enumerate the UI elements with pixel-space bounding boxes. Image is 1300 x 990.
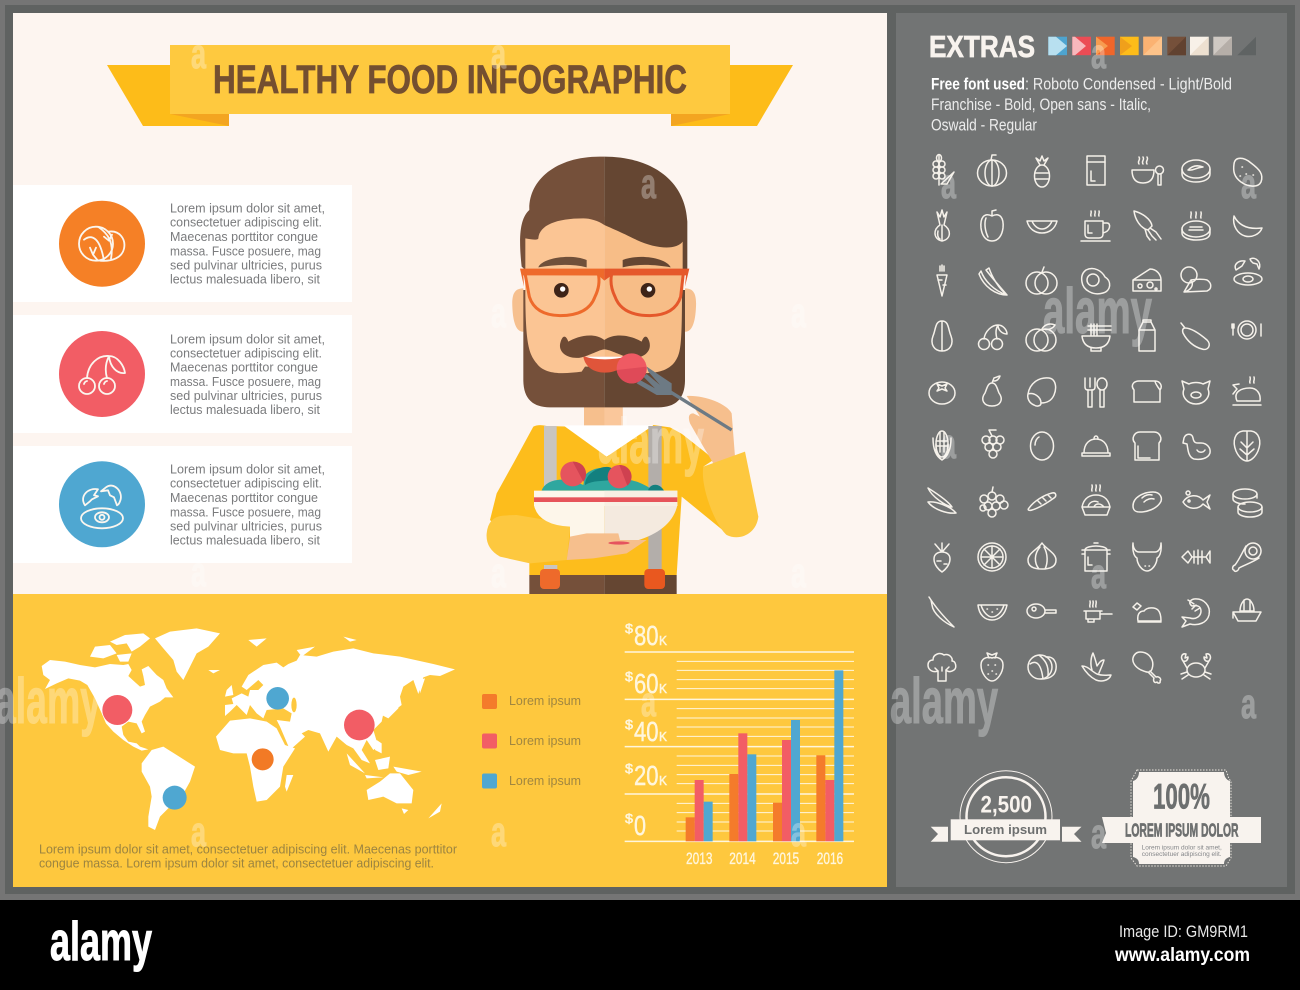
text block: Maecenas porttitor congue: [170, 491, 318, 505]
icon: canned food: [1233, 489, 1262, 517]
map land: [42, 628, 455, 830]
salad: [542, 468, 653, 491]
text block: massa. Fusce posuere, mag: [170, 244, 321, 258]
icon: lettuce: [1234, 431, 1260, 461]
text block: consectetuer adipiscing elit.: [170, 216, 322, 230]
eyebrows: [538, 257, 587, 267]
text block: lectus malesuada libero, sit: [170, 403, 321, 417]
watermarks: a: [791, 808, 806, 855]
font credits: : Roboto Condensed - Light/Bold: [1025, 74, 1232, 94]
icon grid: [928, 154, 1264, 683]
icon: steak: [1182, 160, 1210, 182]
left arm: [487, 515, 571, 563]
icon: toast: [1133, 432, 1161, 460]
watermarks: a: [941, 420, 956, 467]
icon: citrus slice: [978, 543, 1006, 571]
icon: pear: [983, 376, 1001, 406]
right sleeve: [703, 452, 758, 537]
watermarks: a: [491, 808, 506, 855]
bars 2015: [773, 720, 800, 841]
y axis labels: 60: [634, 668, 658, 699]
icon: avocado: [932, 321, 952, 351]
font credits: Franchise - Bold, Open sans - Italic,: [931, 95, 1151, 114]
text block: lectus malesuada libero, sit: [170, 533, 321, 547]
fork with tomato: [670, 392, 732, 430]
icon: melon slice: [1027, 221, 1057, 233]
icon: egg: [1030, 432, 1054, 460]
text block: massa. Fusce posuere, mag: [170, 375, 321, 389]
footer: url: www.alamy.com: [1114, 945, 1250, 966]
icon: peach: [1026, 267, 1057, 294]
left hand: [567, 533, 647, 560]
ears: [512, 288, 696, 332]
legend: Lorem ipsum: [509, 774, 581, 788]
watermarks: alamy: [598, 405, 704, 477]
watermarks: a: [1241, 680, 1256, 727]
icon: garlic: [1028, 543, 1056, 569]
text block: sed pulvinar ultricies, purus: [170, 389, 322, 403]
icon: milk carton: [1139, 320, 1155, 351]
map caption: Lorem ipsum dolor sit amet, consectetuer adipiscing elit. Maecenas porttitor: [39, 841, 458, 856]
legend: [482, 694, 581, 788]
icon: pig: [1182, 381, 1210, 404]
y axis labels: K: [659, 681, 667, 696]
x axis labels: 2013: [686, 849, 712, 868]
legend: Lorem ipsum: [509, 694, 581, 708]
bars 2016: [816, 670, 843, 841]
bowl: [534, 505, 604, 540]
badge: 100%: [1102, 770, 1261, 866]
legend: Lorem ipsum: [509, 734, 581, 748]
icon: grapes: [982, 430, 1004, 458]
icon: cabbage: [1028, 655, 1056, 679]
text block: Maecenas porttitor congue: [170, 361, 318, 375]
text block: consectetuer adipiscing elit.: [170, 477, 322, 491]
panel: egg item: [13, 446, 352, 563]
icon: ham leg: [1233, 540, 1264, 571]
watermarks: alamy: [0, 665, 101, 737]
icon: berry cluster: [980, 487, 1008, 517]
watermarks: a: [1091, 810, 1106, 857]
icon: crab: [1181, 654, 1211, 679]
panel: cherry item: [13, 315, 352, 433]
icon: cabbage: [59, 201, 145, 287]
y axis labels: $: [625, 717, 634, 732]
icon: cherries grid: [978, 325, 1007, 350]
y axis labels: 0: [634, 810, 646, 841]
watermarks: a: [191, 808, 206, 855]
icon: strawberry: [981, 653, 1003, 681]
glasses: [525, 273, 683, 316]
title: HEALTHY FOOD INFOGRAPHIC: [213, 58, 687, 102]
suspenders: [544, 426, 557, 498]
y axis labels: 80: [634, 620, 658, 651]
text block: [170, 332, 325, 417]
icon: bread: [1133, 492, 1161, 512]
watermarks: a: [1241, 160, 1256, 207]
y axis labels: 40: [634, 716, 658, 747]
icon: bell pepper: [981, 210, 1003, 241]
footer: stock logo: alamy: [50, 910, 152, 972]
icon: hot steak: [1182, 212, 1210, 240]
icon: pumpkin: [978, 155, 1006, 186]
watermarks: a: [791, 549, 806, 596]
icon: cracked egg: [1234, 258, 1262, 285]
text block: Lorem ipsum dolor sit amet,: [170, 202, 325, 216]
badge: 2,500: Lorem ipsum: [964, 822, 1047, 837]
shirt collar: [563, 425, 653, 457]
map caption: congue massa. Lorem ipsum dolor sit amet, consectetuer adipiscing elit.: [39, 856, 434, 871]
text block: Lorem ipsum dolor sit amet,: [170, 332, 325, 346]
icon: baguette: [1028, 493, 1056, 510]
watermarks: a: [641, 160, 656, 207]
text block: Lorem ipsum dolor sit amet,: [170, 463, 325, 477]
beard: [523, 290, 604, 407]
icon: chili mango: [1234, 216, 1262, 237]
eyes: [554, 283, 569, 298]
icon: wheat: [933, 154, 954, 185]
text block: Maecenas porttitor congue: [170, 230, 318, 244]
icon: chili: [929, 597, 954, 627]
right hand: [687, 396, 735, 463]
watermarks: a: [491, 549, 506, 596]
icon: squid: [1134, 211, 1161, 240]
y axis labels: K: [659, 773, 667, 788]
icon: roast chicken: [1233, 377, 1261, 405]
panel: left infographic: [13, 13, 887, 887]
badge: 100%: 100%: [1153, 777, 1210, 816]
watermarks: alamy: [1043, 275, 1152, 347]
font credits: Oswald - Regular: [931, 116, 1037, 134]
text block: lectus malesuada libero, sit: [170, 272, 321, 286]
y axis labels: $: [625, 621, 634, 636]
y axis labels: K: [659, 633, 667, 648]
icon: carrot: [937, 265, 947, 296]
watermarks: a: [941, 160, 956, 207]
icon: bread loaf: [1132, 381, 1161, 402]
pants: [529, 575, 604, 594]
icon: beetroot: [934, 543, 950, 572]
mouth: [583, 357, 627, 373]
icon: citrus juicer: [1233, 599, 1261, 621]
watermarks: a: [1091, 30, 1106, 77]
icon: fish: [1183, 491, 1210, 509]
icon: chicken: [1183, 434, 1210, 459]
bars 2013: [686, 780, 713, 841]
icon: tomato: [929, 382, 955, 404]
icon: plate and cutlery: [1232, 321, 1261, 339]
x axis labels: 2016: [817, 849, 843, 868]
text block: consectetuer adipiscing elit.: [170, 346, 322, 360]
y axis labels: $: [625, 811, 634, 826]
torso: [490, 425, 727, 575]
icon: watermelon: [978, 605, 1007, 620]
colour swatches: [1048, 37, 1256, 55]
badge: 100%: consectetuer adipiscing elit.: [1142, 851, 1222, 858]
watermarks: alamy: [890, 665, 998, 737]
bar chart: [625, 620, 854, 868]
badge: 2,500: 2,500: [980, 792, 1032, 819]
icon: corn: [933, 431, 951, 460]
panel: extras: [896, 13, 1287, 887]
icon: shrimp: [1182, 599, 1209, 627]
icon: coffee cup: [1081, 211, 1110, 241]
y axis labels: 20: [634, 760, 658, 791]
icon: sausage slice: [1181, 267, 1211, 292]
icon: spaghetti: [1082, 485, 1110, 515]
x axis labels: [686, 849, 843, 868]
watermarks: a: [191, 548, 206, 595]
face: [525, 217, 604, 373]
icon: fish bone: [1182, 550, 1210, 564]
icon: eggplant: [1181, 323, 1209, 349]
icon: banana: [1082, 653, 1111, 681]
icon: apricot: [1026, 324, 1056, 351]
map caption: [39, 841, 458, 871]
icon: hot pan: [1084, 601, 1112, 622]
icon: frying pan egg: [1027, 604, 1056, 618]
illustration: man eating salad: [487, 157, 758, 594]
icon: bull: [1133, 543, 1161, 571]
text block: [170, 202, 325, 286]
panel: cabbage item: [13, 185, 352, 302]
watermarks: a: [491, 289, 506, 336]
watermarks: a: [1091, 550, 1106, 597]
text block: sed pulvinar ultricies, purus: [170, 258, 322, 272]
text block: massa. Fusce posuere, mag: [170, 505, 321, 519]
icon: fried egg: [1082, 269, 1110, 294]
icon: glass: [1087, 156, 1105, 185]
bars 2014: [729, 733, 756, 841]
font credits: Free font used: [931, 74, 1025, 94]
icon: chili peppers: [979, 268, 1007, 295]
watermarks: a: [641, 678, 656, 725]
icon: mango half: [1028, 378, 1056, 406]
hair: [520, 157, 604, 270]
world map: [42, 628, 455, 830]
icon: cheese: [1133, 269, 1161, 291]
icon: cherries: [59, 331, 145, 417]
mustache: [560, 336, 604, 358]
y axis labels: $: [625, 761, 634, 776]
icon: noodle bowl: [1082, 324, 1111, 351]
icon: cooking pot: [1082, 543, 1110, 571]
icon: cracked egg: [59, 461, 145, 547]
y axis labels: K: [659, 729, 667, 744]
badge: 2,500: [931, 771, 1082, 863]
watermarks: a: [491, 30, 506, 77]
y axis labels: [625, 620, 667, 841]
watermarks: a: [191, 30, 206, 77]
icon: roast: [1133, 603, 1161, 622]
icon: pineapple: [1034, 156, 1050, 187]
footer: image id: Image ID: GM9RM1: [1119, 922, 1248, 941]
y axis labels: $: [625, 669, 634, 684]
map markers: [102, 687, 375, 810]
neck: [584, 403, 623, 428]
icon: drumstick: [1133, 652, 1161, 683]
title ribbon: [107, 45, 793, 126]
icon: onion: [935, 210, 949, 241]
x axis labels: 2015: [773, 849, 799, 868]
icon: food cloche: [1082, 436, 1110, 456]
extras heading: EXTRAS: [929, 29, 1035, 64]
icon: fork and spoon: [1085, 378, 1107, 407]
x axis labels: 2014: [729, 849, 756, 868]
icon: broccoli: [928, 654, 956, 681]
icon: soup bowl and spoon: [1132, 157, 1164, 185]
font credits: [931, 74, 1232, 134]
icon: potato: [1234, 158, 1262, 186]
text block: sed pulvinar ultricies, purus: [170, 519, 322, 533]
text block: [170, 463, 325, 547]
icon: peas: [928, 488, 956, 513]
badge: 100%: Lorem ipsum dolor sit amet,: [1142, 844, 1222, 851]
watermarks: a: [791, 289, 806, 336]
